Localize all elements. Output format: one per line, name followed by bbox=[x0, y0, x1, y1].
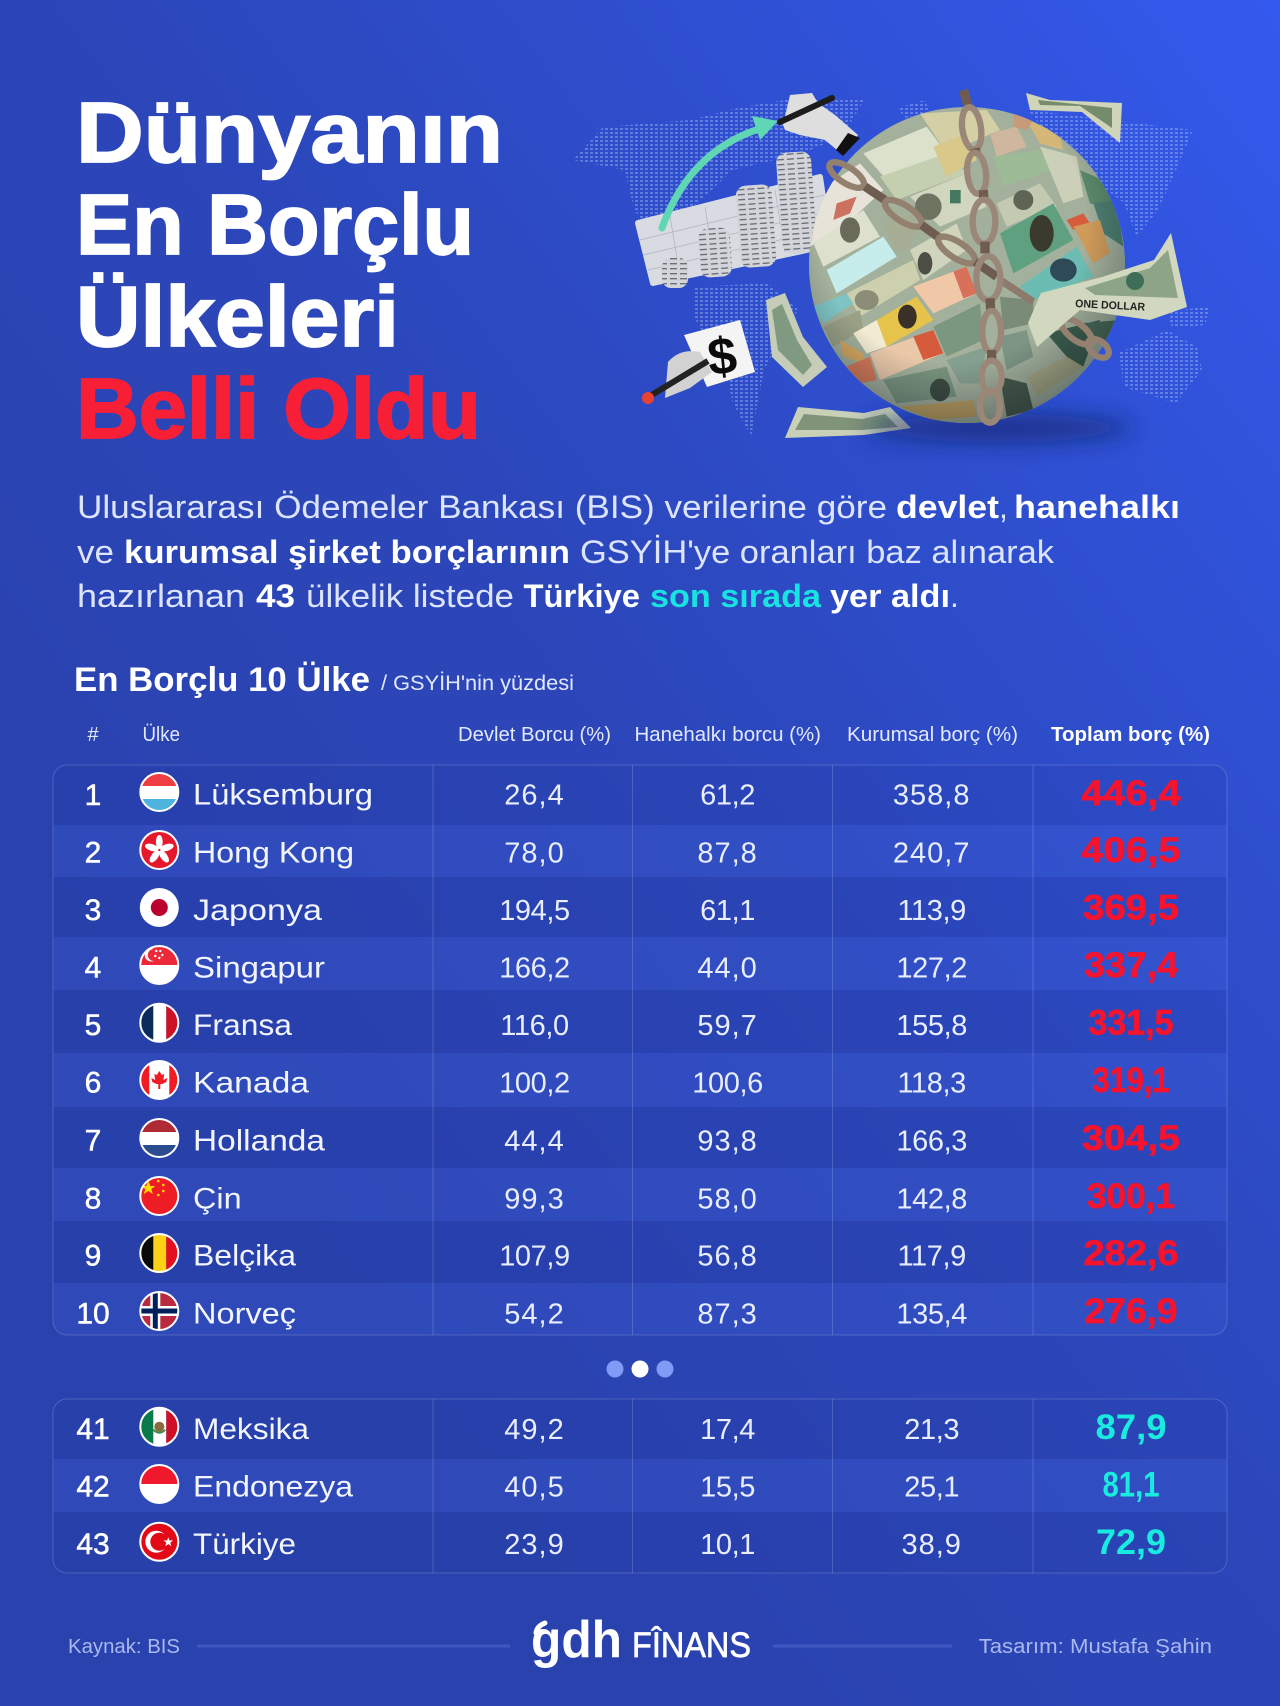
intro paragraph: . bbox=[950, 578, 959, 614]
row 41: 41 bbox=[76, 1413, 110, 1446]
row 43 bbox=[76, 1522, 1166, 1562]
row 43: 72,9 bbox=[1096, 1523, 1166, 1562]
row 41: 49,2 bbox=[504, 1414, 565, 1446]
banknote bottom bbox=[785, 407, 911, 438]
row 42 bbox=[76, 1464, 1160, 1504]
table heading: / GSYİH'nin yüzdesi bbox=[381, 672, 574, 695]
row 43: 23,9 bbox=[504, 1529, 565, 1561]
flag: Norway bbox=[139, 1291, 179, 1331]
banknote right: ONE DOLLAR bbox=[1075, 298, 1145, 314]
row 8: 8 bbox=[85, 1182, 101, 1216]
footer line left bbox=[197, 1644, 510, 1648]
title: Belli Oldu bbox=[76, 362, 481, 457]
row 43: Türkiye bbox=[193, 1528, 296, 1561]
row 8: 142,8 bbox=[896, 1184, 967, 1216]
row 41: 87,9 bbox=[1096, 1408, 1166, 1447]
row 5: 155,8 bbox=[896, 1010, 967, 1042]
flag: Japan bbox=[140, 888, 179, 927]
row 6: 6 bbox=[85, 1066, 101, 1100]
row 4: 127,2 bbox=[896, 952, 967, 984]
row 1: 1 bbox=[85, 779, 101, 812]
flag: Hong Kong bbox=[139, 830, 179, 870]
flag: Indonesia bbox=[139, 1464, 179, 1504]
intro paragraph: ve bbox=[77, 534, 114, 570]
row 9: 107,9 bbox=[499, 1240, 570, 1272]
row 8 bbox=[85, 1176, 1175, 1216]
row 9: Belçika bbox=[193, 1240, 296, 1272]
row 5: 116,0 bbox=[500, 1010, 569, 1042]
globe made of banknotes bbox=[800, 100, 1133, 430]
row 10: 135,4 bbox=[896, 1298, 967, 1330]
banknote top right bbox=[1026, 93, 1122, 143]
logo: gdh Finans bbox=[531, 1611, 751, 1669]
row 3: 194,5 bbox=[499, 895, 570, 927]
row 8: 58,0 bbox=[697, 1184, 758, 1216]
flag: Netherlands bbox=[139, 1118, 179, 1158]
intro paragraph: son sırada bbox=[650, 578, 821, 614]
row 8: 300,1 bbox=[1087, 1177, 1175, 1216]
row 6: Kanada bbox=[193, 1066, 309, 1100]
row 6: 118,3 bbox=[897, 1068, 966, 1100]
row 6: 319,1 bbox=[1092, 1061, 1170, 1100]
intro paragraph: hanehalkı bbox=[1014, 489, 1180, 525]
row 1: Lüksemburg bbox=[193, 778, 373, 812]
row 43: 10,1 bbox=[700, 1529, 755, 1561]
footer line right bbox=[773, 1644, 952, 1648]
intro paragraph: , bbox=[999, 489, 1008, 525]
intro paragraph bbox=[77, 489, 1180, 614]
flag: Luxembourg bbox=[139, 772, 179, 812]
row 1 bbox=[85, 772, 1181, 813]
row 9: 282,6 bbox=[1084, 1234, 1178, 1273]
row 7: 304,5 bbox=[1082, 1119, 1180, 1158]
row 2 bbox=[85, 830, 1180, 870]
title bbox=[76, 86, 503, 457]
row 2: 406,5 bbox=[1082, 831, 1180, 870]
row 7: 166,3 bbox=[896, 1126, 967, 1158]
source text: Kaynak: BIS bbox=[68, 1636, 180, 1658]
title: Dünyanın bbox=[76, 86, 503, 181]
row 9: 117,9 bbox=[897, 1240, 966, 1272]
row 41: 17,4 bbox=[700, 1414, 755, 1446]
row 7: 93,8 bbox=[697, 1126, 758, 1158]
intro paragraph: hazırlanan bbox=[77, 578, 245, 614]
row 5: Fransa bbox=[193, 1009, 292, 1042]
flag: Türkiye bbox=[139, 1522, 179, 1562]
world map dots bbox=[573, 100, 1210, 437]
row 43: 43 bbox=[76, 1528, 110, 1561]
table: top 10 countries bbox=[53, 765, 1227, 1335]
row 7: Hollanda bbox=[193, 1124, 325, 1158]
intro paragraph: Türkiye bbox=[524, 578, 640, 614]
table: bottom 3 countries bbox=[53, 1399, 1227, 1573]
pagination dots bbox=[606, 1360, 674, 1378]
flag: Mexico bbox=[139, 1407, 179, 1447]
row 2: 87,8 bbox=[697, 838, 758, 870]
designer credit: Tasarım: Mustafa Şahin bbox=[979, 1636, 1212, 1658]
row 4: 4 bbox=[85, 952, 101, 984]
intro paragraph: yer aldı bbox=[830, 578, 950, 614]
chart card with coin stacks bbox=[638, 151, 830, 288]
flag: Belgium bbox=[139, 1233, 179, 1273]
row 3: 61,1 bbox=[700, 895, 755, 927]
row 4: Singapur bbox=[193, 952, 325, 984]
table column headers: Kurumsal borç (%) bbox=[847, 724, 1018, 746]
row 9 bbox=[85, 1233, 1178, 1273]
row 5: 59,7 bbox=[697, 1010, 758, 1042]
row 10: 10 bbox=[76, 1298, 110, 1330]
flag: Singapore bbox=[139, 945, 179, 985]
row 2: 2 bbox=[85, 836, 101, 870]
growth arrow bbox=[662, 116, 778, 228]
row 8: 99,3 bbox=[504, 1184, 565, 1216]
row 42: 15,5 bbox=[700, 1472, 755, 1504]
row 1: 26,4 bbox=[504, 780, 565, 812]
row 9: 56,8 bbox=[697, 1240, 758, 1272]
row 7: 44,4 bbox=[504, 1126, 565, 1158]
row 9: 9 bbox=[85, 1240, 101, 1272]
row 10: 54,2 bbox=[504, 1298, 565, 1330]
table column headers bbox=[87, 724, 1210, 746]
table column headers: # bbox=[87, 724, 99, 746]
row 2: 78,0 bbox=[504, 838, 565, 870]
row 3: Japonya bbox=[193, 894, 322, 927]
note with dollar sign and hand: $ bbox=[705, 327, 740, 387]
row 4: 337,4 bbox=[1084, 946, 1179, 985]
row 42: 25,1 bbox=[904, 1472, 959, 1504]
note with dollar sign and hand bbox=[642, 320, 755, 404]
row 1: 61,2 bbox=[700, 780, 755, 812]
banknote left bbox=[766, 293, 827, 387]
title: En Borçlu bbox=[76, 178, 474, 273]
chain vertical bbox=[959, 90, 1002, 423]
row 7: 7 bbox=[85, 1124, 101, 1158]
intro paragraph: 43 bbox=[256, 578, 295, 614]
table heading bbox=[74, 661, 574, 699]
flag: China bbox=[139, 1176, 179, 1216]
row 8: Çin bbox=[193, 1182, 242, 1216]
row 6: 100,6 bbox=[692, 1068, 763, 1100]
row 3: 113,9 bbox=[897, 895, 966, 927]
row 6: 100,2 bbox=[499, 1068, 570, 1100]
table column headers: Hanehalkı borcu (%) bbox=[634, 724, 821, 746]
row 10: 276,9 bbox=[1084, 1292, 1178, 1331]
row 41: 21,3 bbox=[904, 1414, 959, 1446]
flag: France bbox=[139, 1003, 179, 1043]
table column headers: Devlet Borcu (%) bbox=[458, 724, 611, 746]
row 1: 446,4 bbox=[1082, 774, 1181, 813]
row 5: 5 bbox=[85, 1009, 101, 1042]
row 5 bbox=[85, 1003, 1174, 1043]
row 41: Meksika bbox=[193, 1413, 309, 1446]
hand with marker bbox=[780, 93, 860, 156]
intro paragraph: Uluslararası Ödemeler Bankası (BIS) verilerine göre bbox=[77, 489, 887, 525]
banknote right bbox=[1028, 233, 1187, 347]
row 10: 87,3 bbox=[697, 1298, 758, 1330]
table heading: En Borçlu 10 Ülke bbox=[74, 661, 370, 699]
row 42: 81,1 bbox=[1102, 1466, 1160, 1504]
hero illustration: debt globe bbox=[573, 90, 1210, 442]
row 43: 38,9 bbox=[901, 1529, 962, 1561]
row 41 bbox=[76, 1407, 1166, 1447]
globe shadow bbox=[865, 414, 1135, 442]
row 10 bbox=[76, 1291, 1178, 1331]
row 4: 44,0 bbox=[697, 952, 758, 984]
table column headers: Toplam borç (%) bbox=[1051, 724, 1210, 746]
row 2: 240,7 bbox=[893, 838, 970, 870]
row 42: Endonezya bbox=[193, 1470, 353, 1504]
flag: Canada bbox=[139, 1060, 179, 1100]
row 42: 40,5 bbox=[504, 1472, 565, 1504]
chain diagonal bbox=[826, 157, 1112, 361]
intro paragraph: kurumsal şirket borçlarının bbox=[124, 534, 570, 570]
row 5: 331,5 bbox=[1088, 1004, 1174, 1042]
title: Ülkeleri bbox=[76, 270, 399, 365]
row 6 bbox=[85, 1060, 1170, 1100]
row 3: 369,5 bbox=[1083, 888, 1179, 928]
row 7 bbox=[85, 1118, 1180, 1158]
row 3: 3 bbox=[85, 894, 101, 927]
intro paragraph: devlet bbox=[896, 489, 999, 525]
logo: gdh Finans: gdh bbox=[531, 1611, 622, 1669]
row 3 bbox=[85, 888, 1179, 928]
row 42: 42 bbox=[76, 1470, 110, 1504]
intro paragraph: GSYİH'ye oranları baz alınarak bbox=[580, 534, 1055, 570]
row 1: 358,8 bbox=[893, 780, 970, 812]
logo: gdh Finans: FÎNANS bbox=[632, 1626, 751, 1665]
table column headers: Ülke bbox=[142, 724, 180, 746]
intro paragraph: ülkelik listede bbox=[306, 578, 514, 614]
row 4: 166,2 bbox=[499, 952, 570, 984]
row 2: Hong Kong bbox=[193, 836, 354, 870]
row 10: Norveç bbox=[193, 1298, 296, 1330]
row 4 bbox=[85, 945, 1179, 985]
